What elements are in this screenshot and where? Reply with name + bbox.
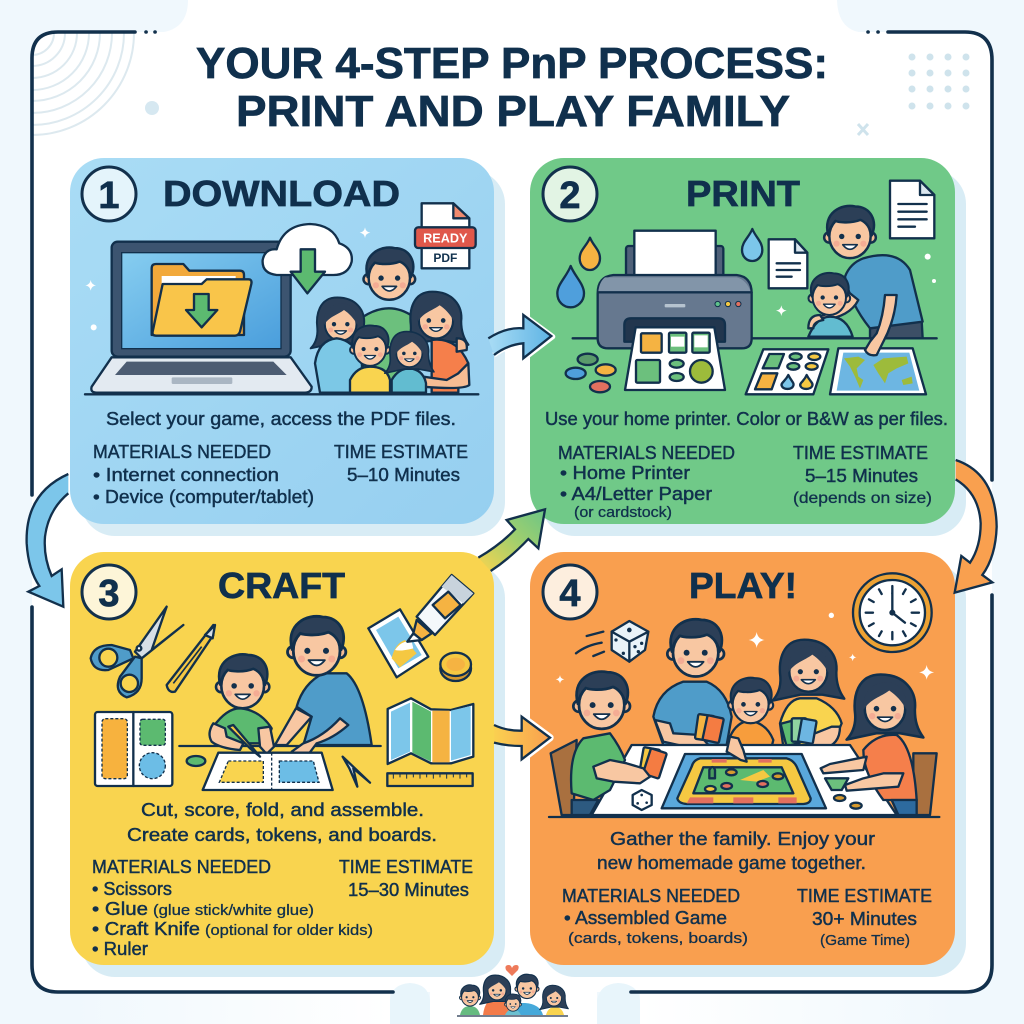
materials needed: (glue stick/white glue) [153, 902, 314, 919]
mother [772, 640, 844, 748]
icon: laptop [91, 242, 312, 393]
step number 3: 3 [98, 573, 120, 615]
ground line [549, 813, 939, 820]
cutting mat [203, 753, 333, 790]
time estimate: TIME ESTIMATE [334, 442, 468, 462]
heading: download: DOWNLOAD [163, 173, 400, 214]
title [196, 39, 828, 136]
heading: play: PLAY! [689, 565, 797, 606]
time estimate: 30+ Minutes [812, 909, 917, 929]
materials needed: (optional for older kids) [205, 922, 373, 939]
materials needed: • Ruler [92, 939, 148, 959]
arrow: download to print [488, 315, 553, 359]
time estimate: 5–15 Minutes [805, 466, 918, 486]
time estimate: 15–30 Minutes [348, 880, 469, 900]
time estimate [797, 886, 932, 949]
arrow: craft to play [494, 717, 550, 759]
illustration: printer and parent with child [557, 181, 937, 394]
icon: die-cut sheet [95, 712, 172, 786]
token and tool [187, 756, 370, 787]
materials needed: • Assembled Game [564, 908, 727, 928]
icon: clock [853, 573, 932, 652]
description [127, 800, 437, 845]
icon: printer [598, 231, 752, 348]
child hand [727, 737, 747, 762]
icon: glue and card [368, 575, 473, 677]
counter line [573, 335, 937, 342]
materials needed: • Internet connection [93, 465, 279, 485]
icon: ready pdf [415, 203, 476, 268]
heading: craft: CRAFT [218, 565, 345, 606]
step number 2: 2 [559, 175, 581, 217]
right girl [821, 675, 923, 815]
sparkles [85, 227, 370, 330]
table [592, 745, 897, 815]
materials needed: MATERIALS NEEDED [93, 442, 271, 462]
illustration: family playing [549, 573, 939, 817]
materials needed: • Craft Knife [92, 919, 200, 939]
panel 3: craft [70, 552, 494, 965]
chairs [551, 740, 937, 815]
game board [662, 754, 826, 808]
time estimate [339, 857, 473, 900]
arrow: print to play [955, 460, 997, 593]
icon: ready pdf: PDF [433, 251, 457, 265]
illustration: laptop, cloud and family [85, 203, 478, 394]
child tool [228, 725, 260, 757]
parent and child [808, 206, 923, 338]
materials needed: • Glue [92, 899, 148, 919]
description: Gather the family. Enjoy your [610, 829, 875, 849]
step number 4: 4 [559, 573, 581, 615]
panel 1: download [70, 158, 494, 524]
materials needed: MATERIALS NEEDED [92, 857, 271, 877]
step number 1 [82, 167, 136, 221]
token stack [566, 354, 616, 392]
title: PRINT AND PLAY FAMILY [236, 87, 790, 136]
footer family icon [457, 965, 568, 1016]
arrow: download to craft [27, 474, 68, 607]
materials needed: MATERIALS NEEDED [558, 443, 735, 463]
description: Select your game, access the PDF files. [106, 409, 456, 429]
panel 2: print [530, 158, 955, 524]
icon: craft knife [167, 625, 215, 692]
icon: ready pdf: READY [423, 232, 468, 246]
sparkles [556, 613, 934, 684]
table die and tokens [633, 790, 862, 810]
materials needed: • Scissors [92, 879, 172, 899]
time estimate: TIME ESTIMATE [797, 886, 932, 906]
decor: cross and circle [145, 101, 868, 135]
panel shadows [81, 170, 966, 977]
parent and child [210, 616, 372, 757]
ground line [85, 391, 478, 398]
description: Cut, score, fold, and assemble. [141, 800, 424, 820]
description: Create cards, tokens, and boards. [127, 825, 437, 845]
icon: scissors [91, 607, 183, 697]
step number 1: 1 [98, 175, 120, 217]
hand cards [695, 714, 817, 746]
arrow: craft to print [478, 509, 545, 571]
corner arcs [32, 33, 134, 135]
materials needed [93, 442, 314, 507]
icon: small document [769, 239, 807, 288]
time estimate: 5–10 Minutes [347, 465, 460, 485]
icon: ruler [387, 773, 473, 786]
child [728, 678, 773, 747]
step number 4 [543, 565, 597, 619]
game sheet [746, 349, 828, 394]
materials needed: MATERIALS NEEDED [562, 886, 740, 906]
illustration: crafting scene [91, 575, 473, 790]
table line [179, 742, 381, 749]
time estimate: (depends on size) [793, 490, 932, 507]
title: YOUR 4-STEP PnP PROCESS: [196, 39, 828, 88]
panel 4: play [530, 552, 955, 965]
materials needed: (or cardstock) [574, 504, 672, 521]
father [653, 619, 732, 748]
materials needed [92, 857, 373, 959]
ink drops [557, 229, 762, 307]
materials needed: • Device (computer/tablet) [93, 487, 314, 507]
materials needed [558, 443, 735, 521]
time estimate [334, 442, 468, 485]
materials needed [562, 886, 748, 947]
icon: folder [152, 264, 252, 336]
heading: print: PRINT [686, 173, 800, 214]
icon: token [440, 653, 471, 681]
materials needed: • A4/Letter Paper [560, 484, 712, 504]
step number 3 [82, 565, 136, 619]
time estimate: (Game Time) [820, 932, 910, 949]
icon: folded board [388, 698, 473, 764]
time estimate: TIME ESTIMATE [339, 857, 473, 877]
step number 2 [543, 167, 597, 221]
icon: flying die [576, 621, 648, 662]
world map [830, 348, 926, 394]
parent forearm on map [865, 295, 897, 355]
icon: large document [890, 181, 934, 238]
icon: cloud download [263, 224, 352, 293]
family group [311, 248, 469, 393]
printed sheet [625, 327, 725, 390]
time estimate: TIME ESTIMATE [793, 443, 928, 463]
decor: dot grid [908, 54, 970, 110]
left boy [571, 672, 667, 815]
description: new homemade game together. [597, 853, 866, 873]
time estimate [793, 443, 932, 507]
sparkles [776, 254, 936, 316]
description: Use your home printer. Color or B&W as per files. [545, 409, 948, 429]
materials needed: (cards, tokens, boards) [568, 930, 748, 947]
description [597, 829, 875, 873]
materials needed: • Home Printer [560, 463, 690, 483]
